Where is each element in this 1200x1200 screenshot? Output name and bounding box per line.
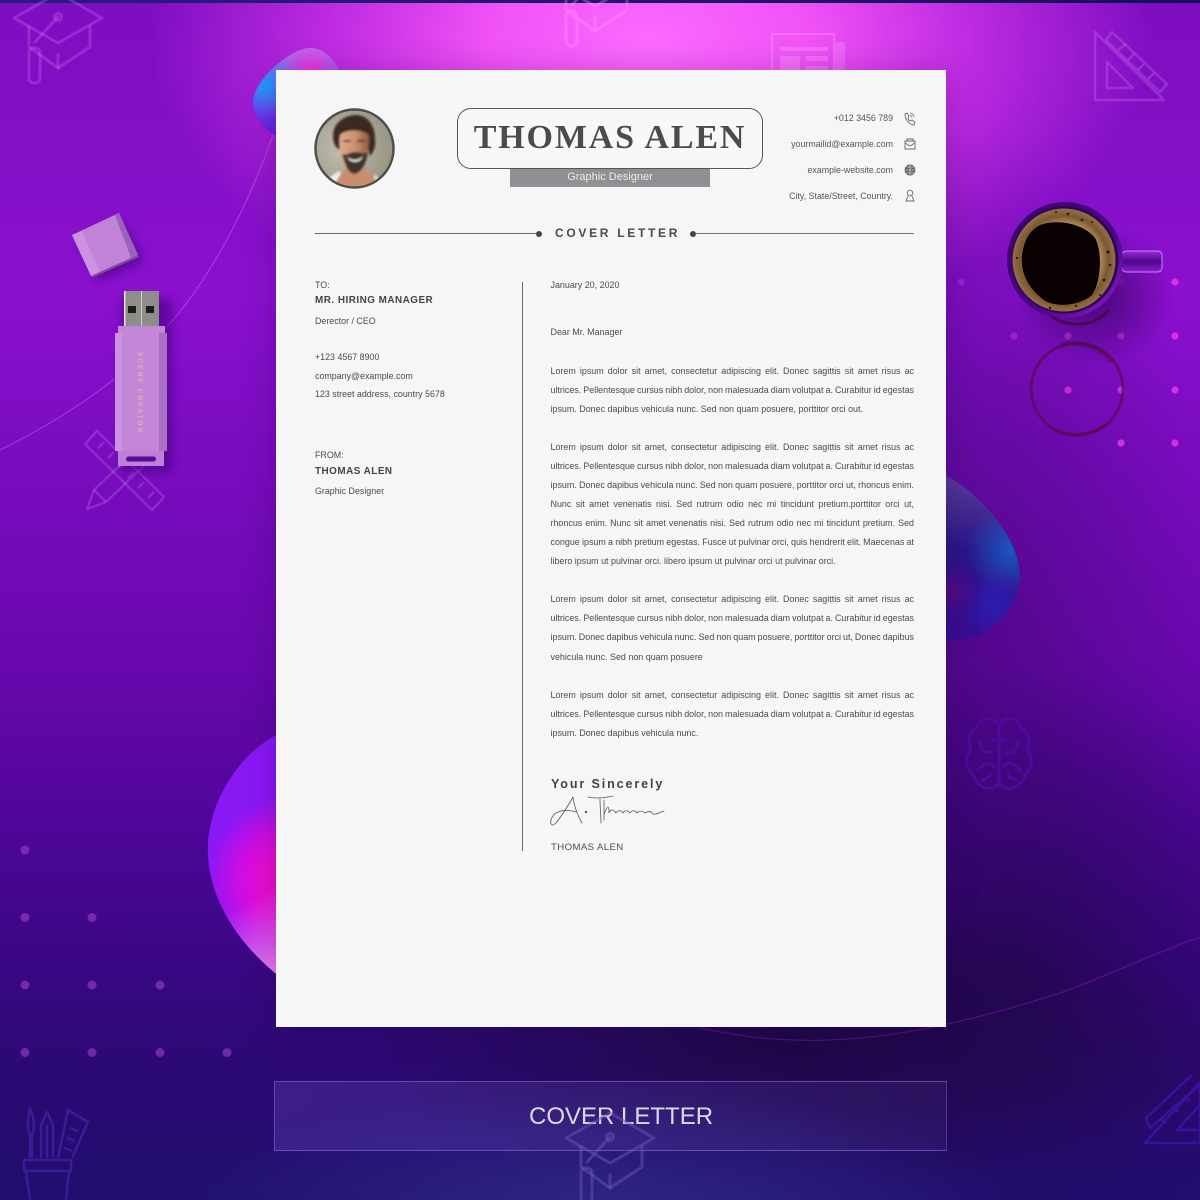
coffee stain ring [1031,343,1123,435]
icon: mortarboard lower centre [564,1112,656,1200]
paragraph 2: Lorem ipsum dolor sit amet, consectetur adipiscing elit. Donec sagittis sit amet risus ac [550,442,914,452]
recipient block [315,280,445,399]
recipient name: MR. HIRING MANAGER [315,295,433,306]
name plate [457,108,763,169]
thin curve: upper left [0,135,273,450]
icon: mortarboard top centre [551,0,639,46]
contact: email: yourmailid@example.com [791,139,893,149]
vertical divider [522,282,523,851]
letter date: January 20, 2020 [550,280,619,290]
paragraph 2: ultrices. Pellentesque cursus nibh dolor, non malesuada diam volutpat a. Curabitur id egestas [550,461,914,471]
sender name: THOMAS ALEN [315,466,393,477]
paragraph 1: ipsum. Donec dapibus vehicula nunc. Sed non quam posuere, porttitor orci out. [550,404,863,414]
icon: newspaper [771,33,845,85]
paragraph 4: Lorem ipsum dolor sit amet, consectetur adipiscing elit. Donec sagittis sit amet risus ac [550,690,914,700]
blob: top left [253,48,340,138]
contact details [789,112,916,202]
paragraph 4 [550,690,914,738]
signatory name: THOMAS ALEN [551,842,624,853]
icon: crossed ruler and pencil left [85,431,164,510]
paragraph 3 [550,594,914,662]
heading rule left [315,233,537,234]
closing line: Your Sincerely [551,777,664,791]
panel: letter paper [276,70,946,1027]
recipient label: TO: [315,280,330,290]
paragraph 1: Lorem ipsum dolor sit amet, consectetur adipiscing elit. Donec sagittis sit amet risus ac [550,366,914,376]
icon: mortarboard top left [14,0,102,83]
USB cap [72,213,145,282]
name plate: THOMAS ALEN [474,119,746,156]
sender title: Graphic Designer [315,486,384,496]
heading rule right [695,233,914,234]
sender label: FROM: [315,450,344,460]
paragraph 1: ultrices. Pellentesque cursus nibh dolor, non malesuada diam volutpat a. Curabitur id egestas [550,385,914,395]
paragraph 3: vehicula nunc. Sed non quam posuere [550,652,703,662]
profile photo [314,108,395,189]
top edge strip [0,0,1200,3]
paragraph 2: Nunc sit amet venenatis nisi. Sed rutrum odio nec mi tincidunt pretium.porttitor orci ut, [550,499,914,509]
coffee mug [1007,202,1175,365]
job title bar [510,169,710,187]
salutation: Dear Mr. Manager [550,327,622,337]
contact icons [904,112,916,202]
heading dot left [536,230,542,236]
icon: set square and ruler top right [1095,32,1167,100]
thin curve: lower right [700,937,1200,1040]
paragraph 2: libero ipsum ut pulvinar orci. libero ipsum ut pulvinar orci ut pulvinar orci. [550,556,836,566]
paragraph 2: ipsum. Donec dapibus vehicula nunc. Sed non quam posuere, porttitor orci ut, rhoncus enim. [550,480,914,490]
recipient role: Derector / CEO [315,316,376,326]
heading text: COVER LETTER [555,226,680,240]
paragraph 2 [550,442,914,566]
blob: right [945,475,1020,641]
paragraph 3: Lorem ipsum dolor sit amet, consectetur adipiscing elit. Donec sagittis sit amet risus ac [550,594,914,604]
signature [550,796,664,826]
paragraph 2: congue ipsum a nibh pretium egestas. Fusce ut pulvinar orci, quis hendrerit elit. Maecenas at [550,537,914,547]
paragraph 4: ipsum. Donec dapibus vehicula nunc. [550,728,698,738]
USB drive: SCENE CREATOR [136,352,143,434]
sender block [315,450,393,496]
dot grid: lower left [20,846,232,1057]
paragraph 3: ultrices. Pellentesque cursus nibh dolor, non malesuada diam volutpat a. Curabitur id egestas [550,613,914,623]
job title bar: Graphic Designer [567,171,653,183]
blob: lower left [208,733,280,977]
paragraph 4: ultrices. Pellentesque cursus nibh dolor, non malesuada diam volutpat a. Curabitur id egestas [550,709,914,719]
paragraph 3: ipsum. Donec dapibus vehicula nunc. Sed non quam posuere, porttitor orci ut, Donec dapibus [550,632,914,642]
section heading: cover letter [315,226,914,240]
contact: phone: +012 3456 789 [834,113,893,123]
recipient email: company@example.com [315,371,413,381]
icon: set square and ruler bottom right [1145,1075,1200,1143]
heading dot right [690,230,696,236]
contact: website: example-website.com [807,165,893,175]
icon: brain [967,718,1031,788]
bottom label text: COVER LETTER [529,1103,713,1130]
paragraph 2: rhoncus enim. Nunc sit amet venenatis nisi. Sed rutrum odio nec mi tincidunt pretium. Sed [550,518,914,528]
dot grid: right [957,278,1179,447]
bottom label box [274,1081,947,1151]
contact: address: City, State/Street, Country. [789,191,893,201]
recipient address: 123 street address, country 5678 [315,389,445,399]
recipient phone: +123 4567 8900 [315,352,379,362]
USB drive [115,291,172,472]
icon: pencil cup [24,1108,88,1200]
paragraph 1 [550,366,914,414]
